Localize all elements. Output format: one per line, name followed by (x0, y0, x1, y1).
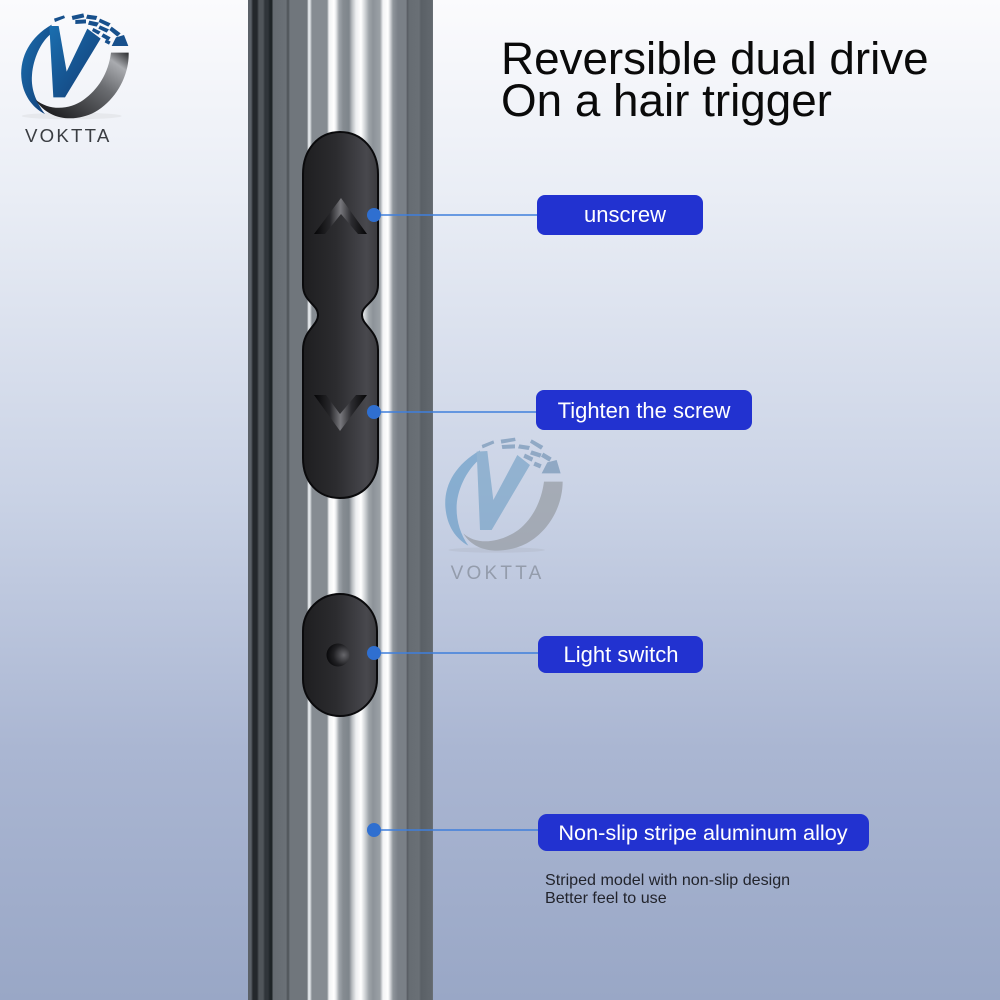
button: dual drive rocker (303, 132, 378, 498)
watermark logo (445, 438, 563, 584)
callout: tighten the screw (367, 390, 752, 430)
icon: up arrow (314, 198, 367, 234)
caption text: Better feel to use (545, 889, 667, 907)
title (501, 33, 929, 126)
callout: light switch: Light switch (564, 642, 678, 667)
caption text: Striped model with non-slip design (545, 871, 790, 889)
caption text (545, 871, 790, 907)
callout: non-slip stripe: Non-slip stripe aluminum alloy (558, 820, 848, 845)
logo: Voktta top left (21, 13, 129, 146)
callout: unscrew: unscrew (584, 202, 666, 227)
callout: light switch (367, 636, 703, 673)
product: striped aluminum handle (248, 0, 433, 1000)
button: light switch (303, 594, 377, 716)
icon: light dot (326, 644, 350, 666)
title: On a hair trigger (501, 75, 832, 126)
title: Reversible dual drive (501, 33, 929, 84)
logo wordmark: VOKTTA (25, 125, 111, 146)
icon: down arrow (314, 395, 367, 431)
watermark wordmark: VOKTTA (451, 563, 542, 584)
callout: non-slip stripe (367, 814, 869, 851)
callout: tighten the screw: Tighten the screw (558, 398, 731, 423)
callout: unscrew (367, 195, 703, 235)
